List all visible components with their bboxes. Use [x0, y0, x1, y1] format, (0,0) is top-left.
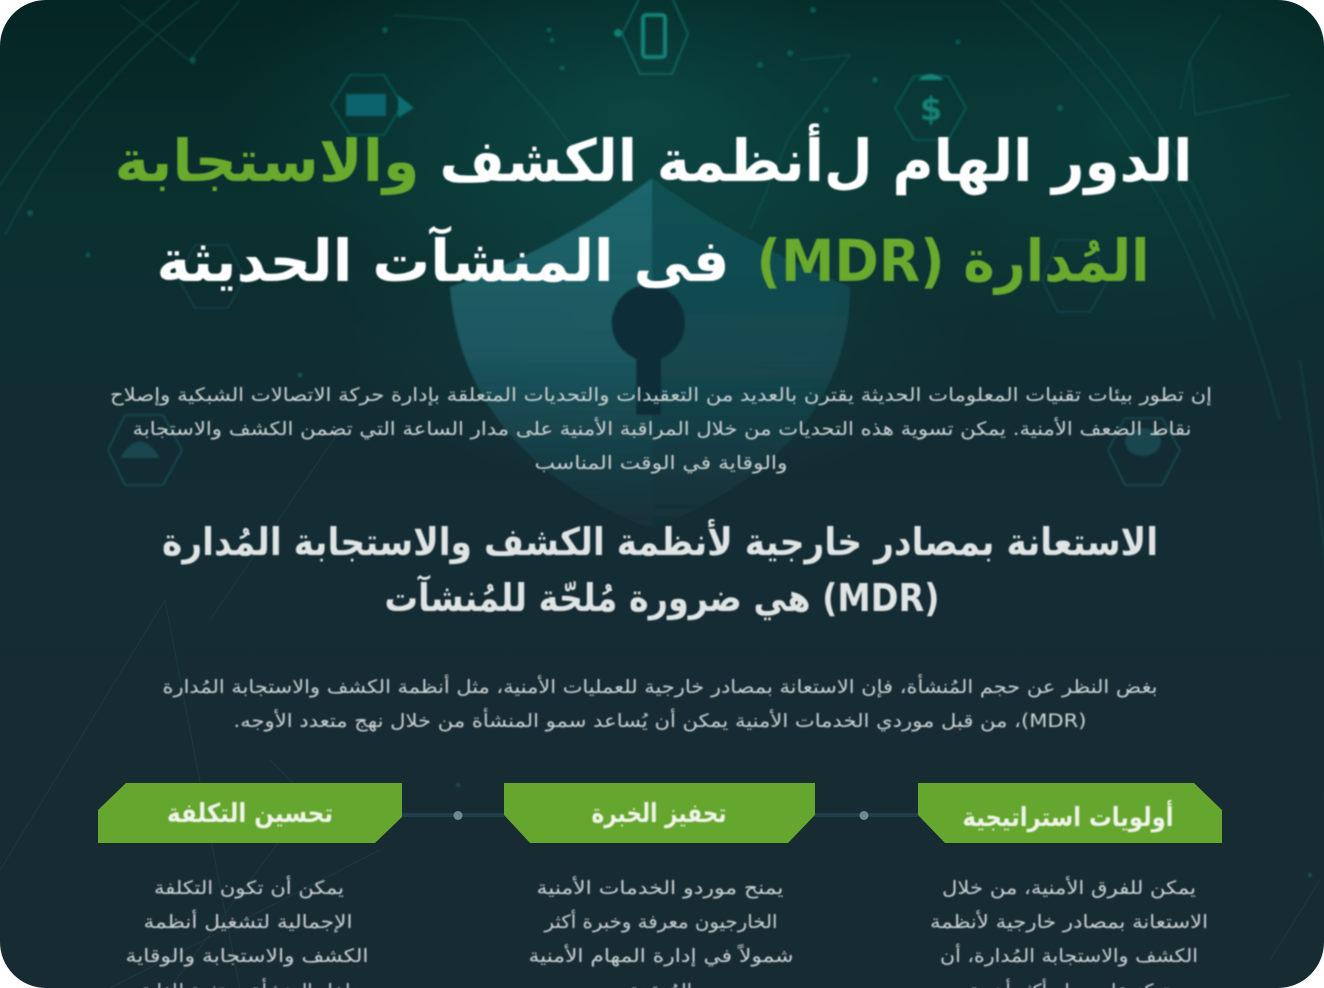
connector right: [815, 811, 918, 820]
icon: side hexagons: [108, 240, 1180, 485]
intro paragraph: نقاط الضعف الأمنية. يمكن تسوية هذه التحديات من خلال المراقبة الأمنية على مدار الساعة التي تضمن الكشف والاستجابة: [132, 417, 1192, 440]
intro paragraph: إن تطور بيئات تقنيات المعلومات الحديثة يقترن بالعديد من التعقيدات والتحديات المتعلقة بإدارة حركة الاتصالات الشبكية وإصلاح: [110, 385, 1212, 406]
keyhole: [612, 284, 685, 415]
body: priorities: [930, 876, 1208, 988]
second paragraph: ‏(MDR)، من قبل موردي الخدمات الأمنية يمكن أن يُساعد سمو المنشأة من خلال نهج متعدد الأوجه.: [234, 708, 1086, 732]
body: cost: [126, 875, 368, 988]
banner: priorities: [918, 783, 1222, 843]
body: expertise: الخارجيون معرفة وخبرة أكثر: [543, 909, 778, 933]
icon: phone hexagon: [614, 0, 688, 74]
title line 1 white: الدور الهام ل‌أنظمة الكشف: [440, 123, 1192, 196]
shield emblem: [450, 178, 850, 530]
panel: strategic priorities: [918, 783, 1222, 988]
banner: cost: [98, 783, 402, 843]
title line 2 green: ‏المُدارة (MDR)‏: [756, 227, 1150, 295]
intro paragraph: [110, 385, 1212, 474]
intro paragraph: والوقاية في الوقت المناسب: [534, 453, 788, 474]
subheading: ‏(MDR) هي ضرورة مُلحّة للمُنشآت: [384, 574, 940, 621]
connector left: [402, 811, 504, 820]
icon: dollar hexagon: [895, 74, 966, 140]
body: cost: يمكن أن تكون التكلفة: [154, 875, 344, 899]
subheading: [162, 518, 1158, 621]
heading: cost: تحسين التكلفة: [167, 799, 333, 829]
body: expertise: [528, 876, 794, 988]
heading: priorities: أولويات استراتيجية: [962, 800, 1174, 833]
body: expertise: يمنح موردو الخدمات الأمنية: [536, 876, 784, 899]
panel: expertise: [504, 783, 815, 988]
body: priorities: يمكن للفرق الأمنية، من خلال: [942, 876, 1196, 899]
heading: expertise: تحفيز الخبرة: [592, 799, 726, 829]
icon: card hexagon: [331, 75, 414, 135]
body: priorities: الكشف والاستجابة المُدارة، أن: [940, 943, 1198, 967]
second paragraph: بغض النظر عن حجم المُنشأة، فإن الاستعانة بمصادر خارجية للعمليات الأمنية، مثل أنظمة الكشف والاستجابة المُدارة: [162, 674, 1158, 698]
body: cost: الإجمالية لتشغيل أنظمة: [144, 909, 352, 933]
panel: cost improvement: [98, 783, 402, 988]
title: [114, 123, 1192, 295]
body: cost: الكشف والاستجابة والوقاية: [126, 946, 368, 967]
title line 2 white: فى المنشآت الحديثة: [156, 225, 730, 295]
body: priorities: الاستعانة بمصادر خارجية لأنظمة: [930, 910, 1208, 933]
second paragraph: [162, 674, 1158, 732]
subheading: الاستعانة بمصادر خارجية لأنظمة الكشف والاستجابة المُدارة: [162, 518, 1158, 565]
icon: dollar hexagon: $: [920, 90, 942, 128]
title line 1 green: والاستجابة: [114, 127, 420, 196]
banner: expertise: [504, 783, 815, 843]
body: expertise: شمولاً في إدارة المهام الأمنية: [528, 943, 794, 967]
